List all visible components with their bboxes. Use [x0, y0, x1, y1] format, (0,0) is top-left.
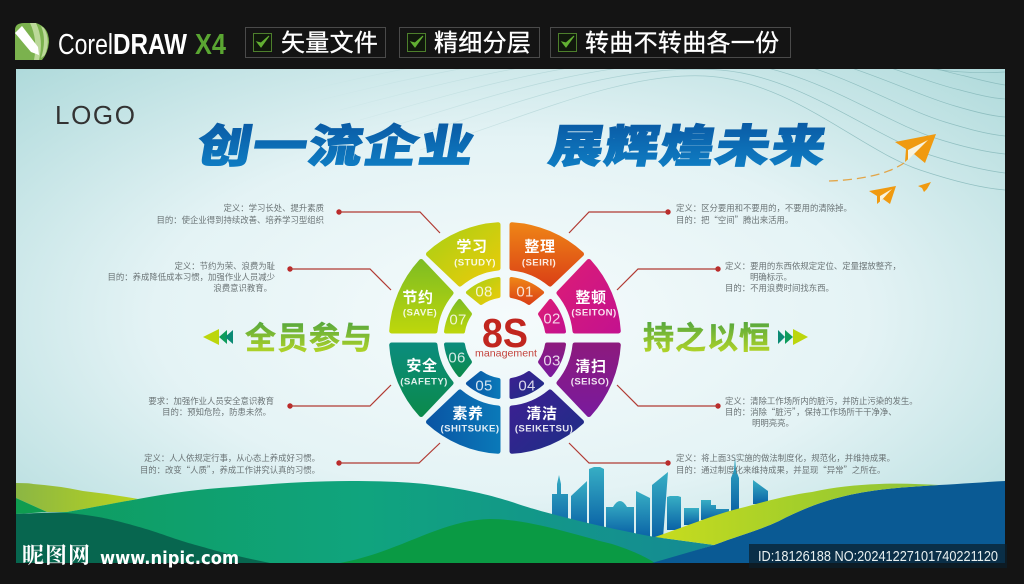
center 8S title: 8S — [482, 310, 528, 356]
header tag: vector file — [246, 28, 386, 58]
wheel labels: (SEITON) — [571, 308, 617, 318]
slogan right with arrows: 持之以恒 — [643, 321, 771, 356]
callout: shitsuke — [140, 443, 440, 476]
wheel labels: (SEIKETSU) — [515, 424, 573, 434]
header tag: fine layers — [400, 28, 540, 58]
LOGO placeholder: LOGO — [55, 100, 135, 130]
callout: study: 定义：学习长处、提升素质 — [224, 202, 324, 214]
wheel labels: 清洁 — [526, 404, 558, 422]
watermark: image id: ID:18126188 NO:20241227101740221120 — [758, 549, 998, 565]
callout: safety: 目的：预知危险，防患未然。 — [162, 406, 271, 418]
callout: seiso: 目的：消除“脏污”，保持工作场所干干净净、 — [725, 406, 897, 418]
callout: safety: 要求：加强作业人员安全意识教育 — [148, 395, 274, 407]
wheel numbers: 08 — [475, 284, 493, 300]
hill: lime left — [16, 483, 138, 512]
callout: seiton: 目的：不用浪费时间找东西。 — [725, 282, 834, 294]
wheel labels: (SEIRI) — [522, 258, 556, 268]
wheel labels: (SAFETY) — [400, 376, 448, 388]
wheel numbers: 04 — [518, 378, 536, 394]
callout: seiso: 明明亮亮。 — [752, 417, 794, 429]
wheel numbers: 01 — [516, 284, 534, 300]
hill: dark green front — [16, 513, 270, 563]
callout: seiso — [617, 385, 918, 429]
header logo: CorelDRAW X4 — [15, 23, 226, 61]
wheel numbers: 05 — [475, 378, 493, 394]
callout: shitsuke: 目的：改变“人质”，养成工作讲究认真的习惯。 — [140, 464, 320, 476]
callout: seiri — [569, 202, 852, 233]
callout: save — [108, 260, 391, 294]
callout: seiketsu — [569, 443, 895, 476]
skyline — [552, 456, 768, 538]
header tag: vector file: 矢量文件 — [281, 30, 378, 57]
hill: blue right — [652, 481, 1005, 563]
center 8S title: management — [475, 348, 537, 360]
callout: save: 定义：节约为荣、浪费为耻 — [174, 260, 276, 272]
wheel numbers — [448, 284, 561, 394]
wheel numbers: 07 — [449, 312, 467, 328]
watermark: nipic — [22, 539, 239, 570]
callout: seiri: 定义：区分要用和不要用的，不要用的清除掉。 — [676, 202, 852, 214]
wheel numbers: 03 — [543, 352, 561, 370]
wheel labels: (SAVE) — [403, 308, 437, 318]
callout: safety — [148, 385, 391, 418]
wheel numbers: 06 — [448, 350, 466, 366]
wheel labels: 整顿 — [575, 288, 607, 306]
hill: green lower — [340, 519, 655, 563]
8S wheel — [392, 225, 618, 451]
wheel labels: 安全 — [406, 356, 438, 374]
header logo: CorelDRAW X4: DRAW — [113, 29, 188, 61]
callout: save: 目的：养成降低成本习惯，加强作业人员减少 — [108, 271, 275, 283]
callout: seiketsu: 定义：将上面3S实施的做法制度化，规范化，并维持成果。 — [676, 452, 895, 464]
title right: 展辉煌未来 — [545, 122, 830, 172]
callout: save: 浪费意识教育。 — [213, 282, 272, 294]
callout: study: 目的：使企业得到持续改善、培养学习型组织 — [156, 214, 324, 226]
wheel labels: 素养 — [452, 404, 484, 422]
callout: seiton: 定义：要用的东西依规定定位、定量摆放整齐， — [725, 260, 901, 272]
wheel inner segments — [446, 279, 564, 397]
callout: seiton: 明确标示。 — [750, 271, 792, 283]
wheel numbers: 02 — [543, 310, 561, 328]
wheel labels: 学习 — [456, 238, 488, 256]
wheel labels — [400, 238, 617, 434]
header tag: curved and uncurved versions: 转曲不转曲各一份 — [585, 30, 779, 57]
header logo: CorelDRAW X4: Corel — [58, 29, 113, 61]
wheel labels: (SHITSUKE) — [441, 424, 499, 434]
wheel labels: 清扫 — [575, 358, 607, 376]
callout: shitsuke: 定义：人人依规定行事，从心态上养成好习惯。 — [144, 452, 320, 464]
wheel labels: (SEISO) — [571, 376, 609, 388]
callout: seiketsu: 目的：通过制度化来维持成果，并显现“异常”之所在。 — [676, 464, 885, 476]
watermark: image id — [749, 544, 1007, 568]
watermark: nipic: 昵图网 — [22, 539, 90, 570]
wave lines — [373, 69, 1005, 190]
header logo: CorelDRAW X4: X4 — [195, 29, 226, 61]
paper planes — [829, 134, 936, 204]
hill: green left — [16, 498, 47, 514]
watermark: nipic: www.nipic.com — [100, 548, 239, 569]
hill: lime swoosh — [655, 484, 939, 545]
wheel labels: (STUDY) — [454, 258, 496, 268]
wheel labels: 整理 — [524, 238, 556, 256]
slogan left with arrows: 全员参与 — [245, 321, 373, 356]
title left: 创一流企业 — [193, 122, 478, 172]
callout: seiton — [617, 260, 901, 294]
wheel outer segments — [392, 225, 618, 451]
header tag: fine layers: 精细分层 — [434, 30, 531, 57]
callout: seiri: 目的：把“空间”腾出来活用。 — [676, 214, 793, 226]
callout: seiso: 定义：清除工作场所内的脏污，并防止污染的发生。 — [725, 395, 918, 407]
callout: study — [156, 202, 440, 233]
wheel labels: 节约 — [402, 288, 434, 306]
hill: main teal — [16, 481, 714, 563]
